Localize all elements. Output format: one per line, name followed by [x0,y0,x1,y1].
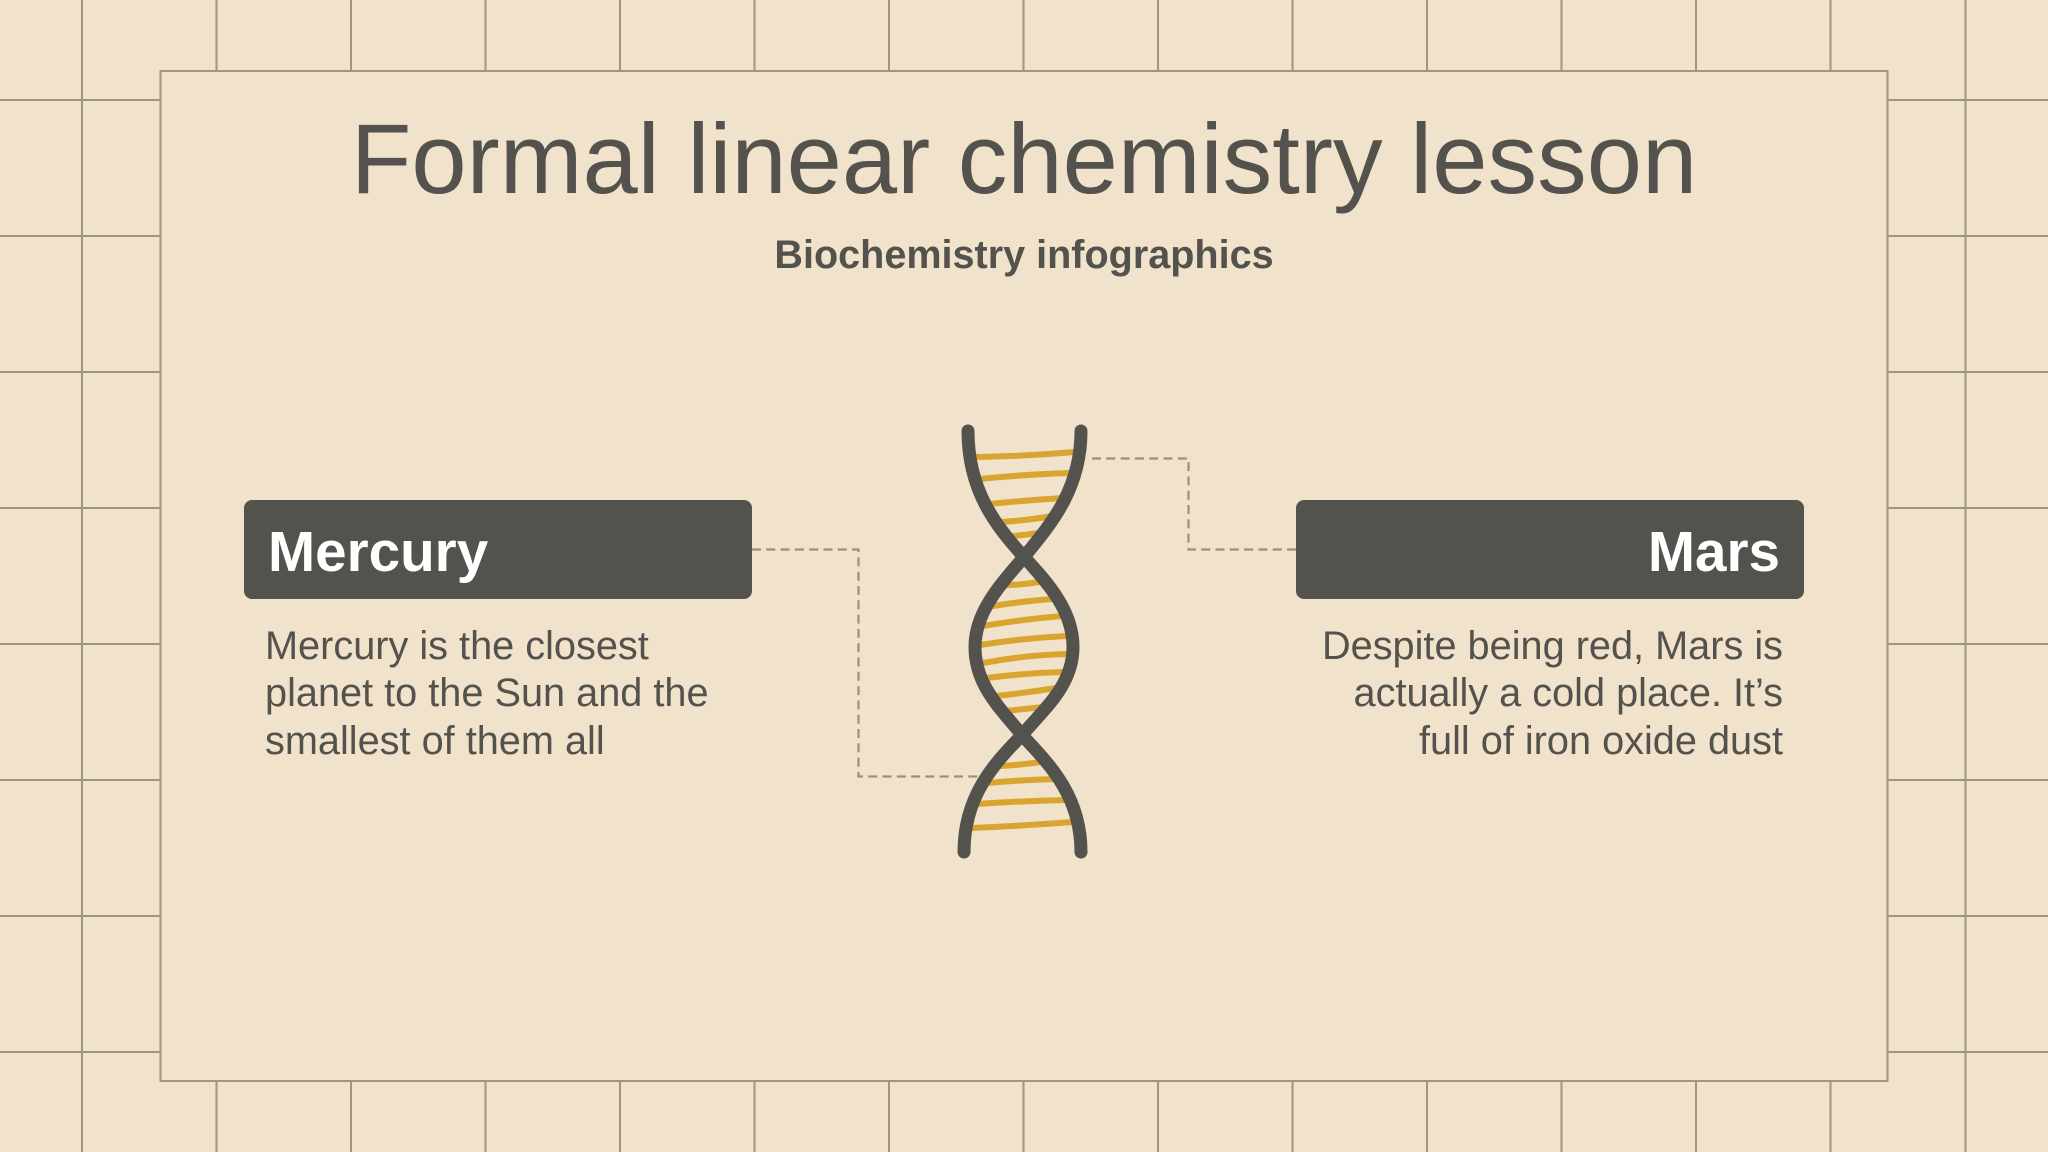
panel: Mars [1296,500,1804,763]
Mars description [1322,624,1783,763]
Mercury description: Mercury is the closest [265,624,649,668]
Mercury label bar: Mercury [268,520,488,583]
DNA rungs [971,452,1074,828]
Mars description: actually a cold place. It’s [1354,671,1783,715]
Mars label bar [1296,500,1804,599]
Mars label bar: Mars [1648,520,1780,583]
Mars description: full of iron oxide dust [1419,719,1783,763]
Mercury label bar [244,500,752,599]
DNA strands [964,431,1081,852]
subtitle: Biochemistry infographics [774,233,1274,277]
Mercury description: smallest of them all [265,719,605,763]
Mercury description [265,624,709,763]
Mercury description: planet to the Sun and the [265,671,709,715]
icon: DNA double helix [958,424,1088,858]
title: Formal linear chemistry lesson [351,104,1697,215]
Mars description: Despite being red, Mars is [1322,624,1783,668]
panel: Mercury [244,500,752,763]
